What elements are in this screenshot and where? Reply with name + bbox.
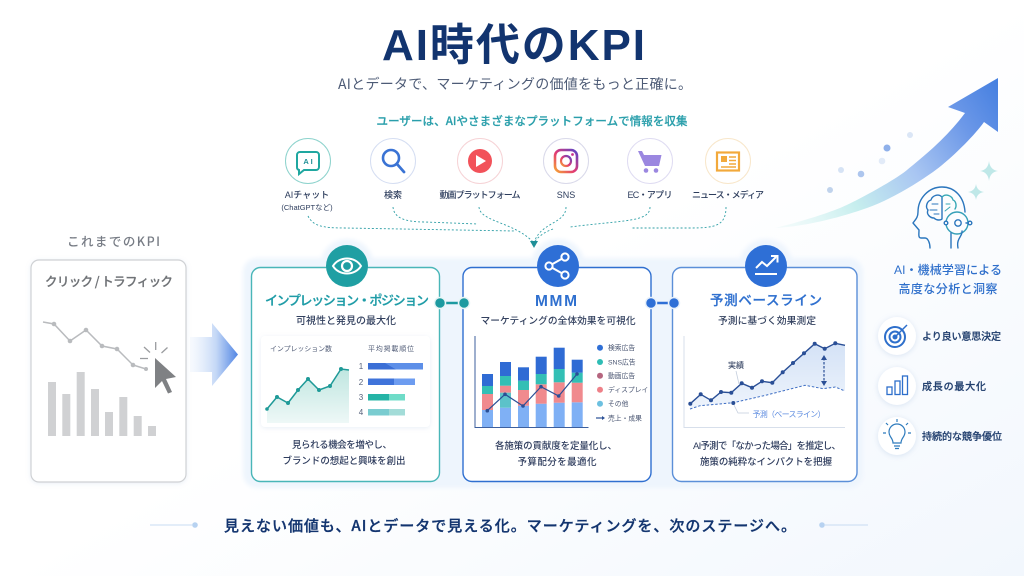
platform icons row <box>286 138 750 184</box>
chart legend: 検索広告 <box>608 343 635 352</box>
platform labels: EC・アプリ <box>628 190 672 200</box>
panel: previous KPI <box>31 260 186 482</box>
chart legend <box>596 343 648 422</box>
heading: click / traffic: クリック / トラフィック <box>45 271 173 290</box>
heading: platforms: ユーザーは、AIやさまざまなプラットフォームで情報を収集 <box>376 113 688 129</box>
icon: AI chat: A I <box>303 157 313 166</box>
bar chart: average position: 4 <box>359 408 364 417</box>
arrowhead <box>530 241 538 248</box>
chart legend: 売上・成果 <box>608 414 642 422</box>
chart legend: その他 <box>608 399 629 408</box>
icon: shopping cart <box>628 138 672 184</box>
panel: MMM <box>463 245 651 482</box>
stacked bar chart <box>475 336 588 428</box>
line chart: declining <box>43 322 148 371</box>
panel: forecast baseline <box>672 245 857 482</box>
card description: AI予測で「なかった場合」を推定し、 <box>693 440 841 452</box>
bar chart: traffic <box>48 372 156 436</box>
heading: AI analysis: AI・機械学習による <box>894 262 1002 277</box>
footer right ornament <box>819 522 868 528</box>
line chart: forecast vs actual <box>684 336 845 428</box>
icon: target <box>885 325 907 347</box>
chart legend: ディスプレイ <box>608 385 648 394</box>
card description <box>495 440 617 468</box>
chart legend: SNS広告 <box>608 358 636 366</box>
icon: Instagram <box>544 138 588 184</box>
chart panel: インプレッション数 <box>270 344 332 353</box>
bar chart: average position: 1 <box>359 362 364 371</box>
connector: impression to MMM <box>434 298 470 308</box>
icon: AI head with brain <box>913 187 972 248</box>
badge: eye <box>326 245 368 287</box>
card heading: MMM <box>535 293 577 310</box>
platform labels: 検索 <box>384 189 402 200</box>
card description: 予算配分を最適化 <box>518 456 597 468</box>
bar chart: average position <box>359 362 423 417</box>
arrow: previous to new KPI <box>190 323 238 386</box>
benefit: competitive advantage: 持続的な競争優位 <box>922 430 1002 443</box>
big growth arrow <box>775 78 998 228</box>
decorative dots <box>827 132 913 193</box>
panel: impression and position <box>252 245 440 482</box>
line chart: impressions <box>265 367 349 423</box>
platform labels: (ChatGPTなど) <box>281 203 333 212</box>
left section heading: これまでのKPI <box>67 231 160 250</box>
card description: 見られる機会を増やし、 <box>292 439 392 451</box>
card subheading: 可視性と発見の最大化 <box>296 314 396 327</box>
line chart: forecast vs actual: 予測（ベースライン） <box>752 409 826 419</box>
platform labels <box>281 189 764 212</box>
benefit: growth <box>878 367 986 405</box>
bar chart: average position: 3 <box>359 393 364 402</box>
connector: MMM to baseline <box>646 298 680 308</box>
card description <box>282 439 406 467</box>
platform labels: SNS <box>557 190 575 200</box>
card subheading: 予測に基づく効果測定 <box>718 314 816 327</box>
footer left ornament <box>150 522 198 528</box>
platform labels: 動画プラットフォーム <box>440 189 520 200</box>
card heading: インプレッション・ポジション <box>265 290 429 309</box>
benefit: better decisions: より良い意思決定 <box>922 330 1001 343</box>
card description: 各施策の貢献度を定量化し、 <box>495 440 617 452</box>
badge: trend <box>745 245 787 287</box>
panel: new KPI backdrop <box>243 239 863 488</box>
card description <box>693 440 841 468</box>
icon: news <box>706 138 750 184</box>
card description: ブランドの想起と興味を創出 <box>282 455 406 467</box>
platform labels: AIチャット <box>285 190 329 200</box>
chart legend: 動画広告 <box>608 371 635 380</box>
icon: cursor click <box>140 342 176 394</box>
dashed arrows converging to MMM <box>308 207 726 243</box>
benefit: growth: 成長の最大化 <box>922 380 986 393</box>
footer message: 見えない価値も、AIとデータで見える化。マーケティングを、次のステージへ。 <box>224 515 796 536</box>
heading: AI analysis <box>894 262 1002 296</box>
icon: video play <box>458 138 502 184</box>
benefit: better decisions <box>878 317 1001 355</box>
benefit: competitive advantage <box>878 417 1002 455</box>
card heading: 予測ベースライン <box>710 289 822 309</box>
title: AI時代のKPI <box>382 21 645 70</box>
icon: light bulb <box>883 419 911 448</box>
chart panel: 平均掲載順位 <box>368 344 414 353</box>
card description: 施策の純粋なインパクトを把握 <box>700 456 832 468</box>
card subheading: マーケティングの全体効果を可視化 <box>480 314 636 327</box>
sparkles <box>968 161 998 200</box>
heading: AI analysis: 高度な分析と洞察 <box>898 281 998 296</box>
bar chart: average position: 2 <box>359 378 364 387</box>
badge: share nodes <box>537 245 579 287</box>
line chart: forecast vs actual: 実績 <box>728 360 744 370</box>
subtitle: AIとデータで、マーケティングの価値をもっと正確に。 <box>338 74 692 94</box>
icon: bars <box>887 376 908 394</box>
chart panel <box>261 336 430 427</box>
platform labels: ニュース・メディア <box>692 189 764 200</box>
icon: search <box>370 138 416 184</box>
icon: AI chat <box>286 138 330 184</box>
